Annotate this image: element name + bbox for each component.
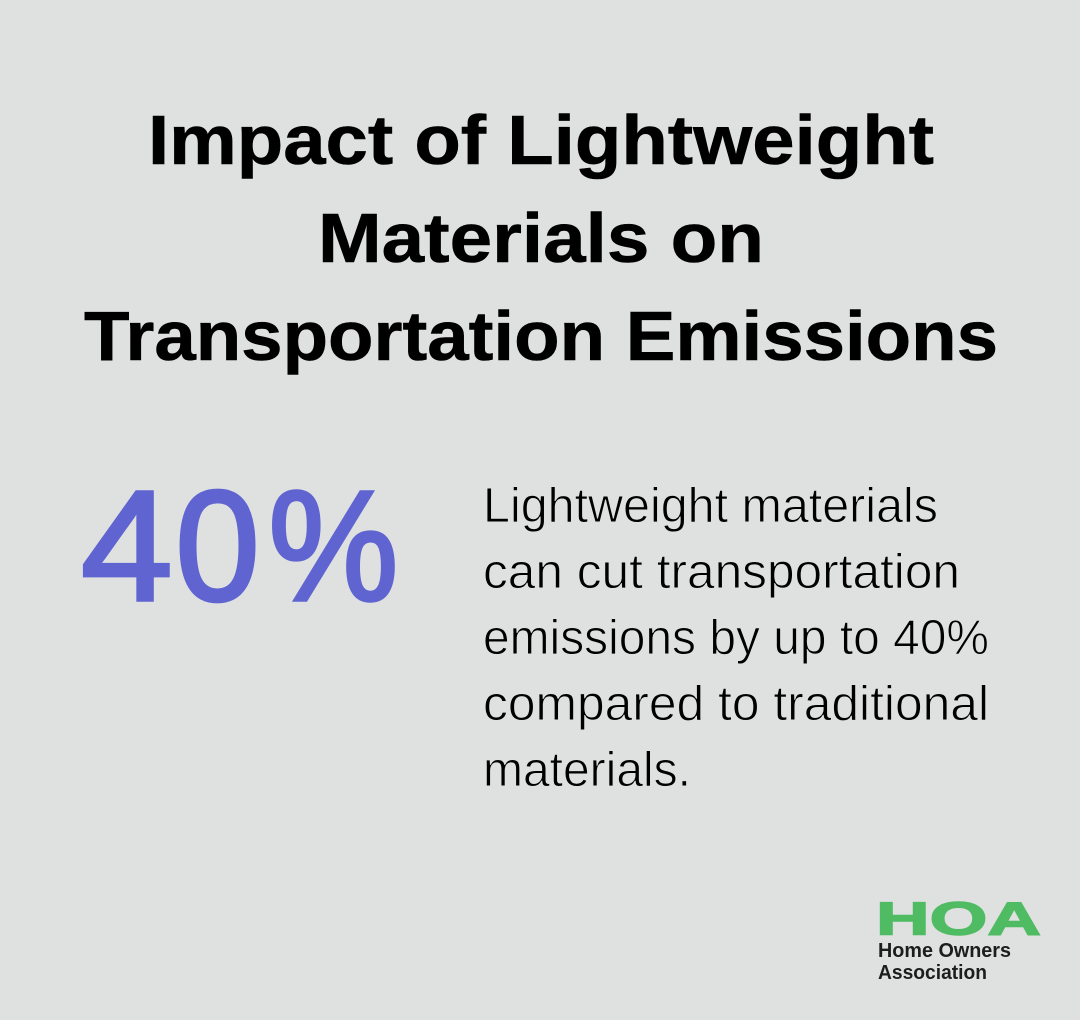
description text: can cut transportation bbox=[483, 545, 960, 599]
big statistic: 40%: 4 bbox=[81, 459, 173, 634]
title: Transportation Emissions bbox=[84, 297, 998, 375]
description text bbox=[483, 479, 989, 797]
description text: emissions by up to 40% bbox=[483, 611, 989, 665]
title: Impact of Lightweight bbox=[148, 101, 934, 179]
logo mark: HOA: HOA bbox=[876, 892, 1041, 944]
description text: Lightweight materials bbox=[483, 479, 938, 533]
big statistic: 40% bbox=[81, 458, 398, 634]
logo text bbox=[878, 940, 1011, 984]
big statistic: 40%: % bbox=[268, 459, 398, 634]
logo: Home Owners Association bbox=[876, 892, 1041, 984]
logo text: Home Owners bbox=[878, 940, 1011, 962]
description text: compared to traditional bbox=[483, 677, 989, 731]
big statistic: 40%: 0 bbox=[175, 458, 260, 634]
description text: materials. bbox=[483, 743, 691, 797]
logo text: Association bbox=[878, 962, 987, 984]
title bbox=[84, 101, 998, 375]
title: Materials on bbox=[318, 199, 764, 277]
